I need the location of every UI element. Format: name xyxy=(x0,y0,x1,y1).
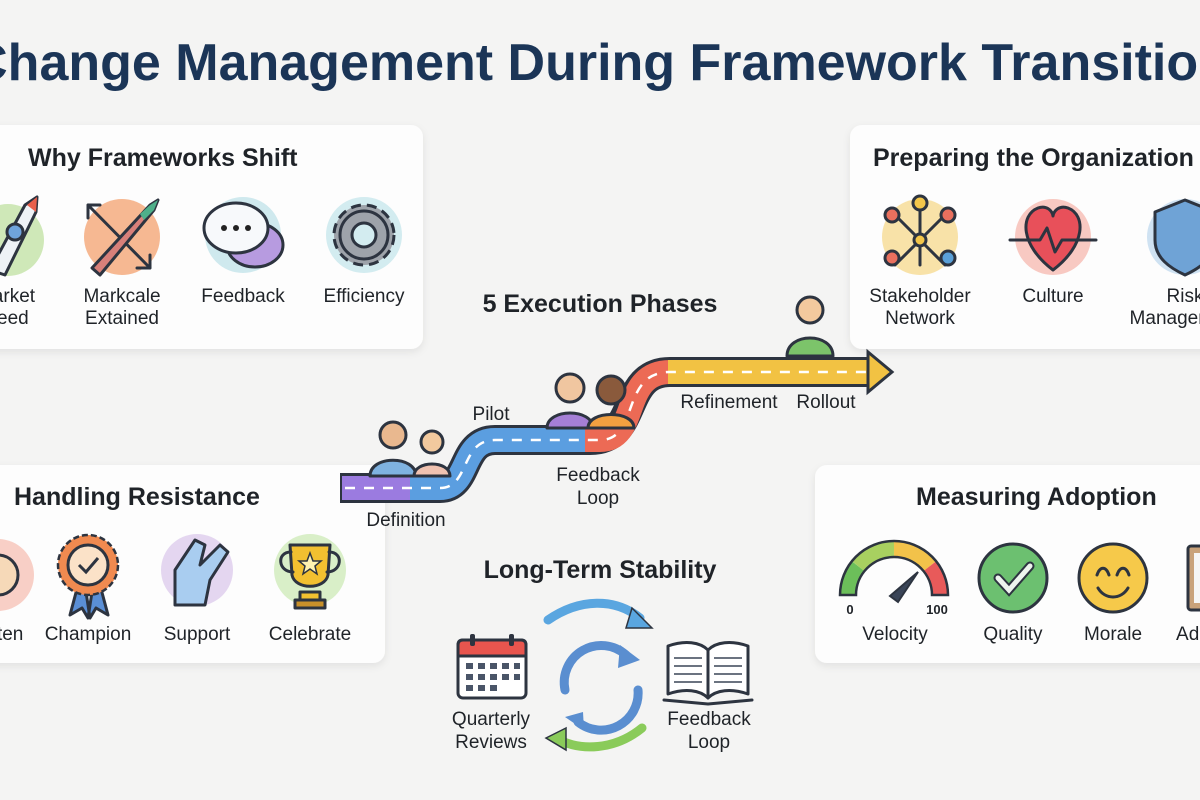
icon: stakeholder network xyxy=(882,196,958,275)
icon: rocket xyxy=(0,197,44,276)
heading: 5 execution phases: 5 Execution Phases xyxy=(483,290,717,318)
label: champion: Champion xyxy=(45,624,131,645)
label: gauge scale: 0 xyxy=(846,602,854,617)
icon: open book xyxy=(664,643,752,704)
icon: listen xyxy=(0,539,34,611)
text: Loop xyxy=(688,732,730,753)
icon: gear xyxy=(326,197,402,273)
panel: preparing the organization: Network xyxy=(885,308,955,329)
icon: gauge xyxy=(840,541,948,602)
chart: execution road xyxy=(340,297,892,488)
text: Reviews xyxy=(455,732,527,753)
label: quarterly reviews: Quarterly xyxy=(452,709,531,730)
icon: adherence board xyxy=(1188,546,1200,610)
people: pilot/feedback xyxy=(547,374,634,428)
icon: support hands xyxy=(161,534,233,606)
heading: measuring adoption: Measuring Adoption xyxy=(916,483,1157,511)
icon: smiley xyxy=(1079,544,1147,612)
icon: trophy xyxy=(274,534,346,608)
label: velocity: Velocity xyxy=(862,624,928,645)
label: stakeholder network: Stakeholder xyxy=(869,286,971,307)
heading: why frameworks shift: Why Frameworks Shift xyxy=(28,144,298,172)
panel: handling resistance xyxy=(0,465,385,663)
panel: preparing the organization xyxy=(850,125,1200,349)
people: definition xyxy=(370,422,450,476)
panel: why frameworks shift xyxy=(0,125,423,349)
label: rollout: Rollout xyxy=(796,392,856,413)
label: pilot: Pilot xyxy=(473,404,510,425)
label: culture: Culture xyxy=(1022,286,1084,307)
heading: handling resistance: Handling Resistance xyxy=(14,483,260,511)
icon: champion badge xyxy=(58,535,118,618)
icon: shield xyxy=(1147,199,1200,275)
label: feedback: Feedback xyxy=(201,286,285,307)
icon: market extended xyxy=(84,199,160,275)
heading: long-term stability: Long-Term Stability xyxy=(484,556,717,584)
heading: preparing: Preparing the Organization xyxy=(873,144,1194,172)
icon: quality check xyxy=(979,544,1047,612)
text: Loop xyxy=(577,488,619,509)
person: rollout xyxy=(787,297,833,356)
panel: measuring adoption xyxy=(815,465,1200,663)
label: celebrate: Celebrate xyxy=(269,624,351,645)
icon: heart xyxy=(1010,199,1096,275)
label: feedback loop: Feedback xyxy=(667,709,751,730)
label: refinement: Refinement xyxy=(680,392,778,413)
label: support: Support xyxy=(164,624,231,645)
icon: calendar xyxy=(458,634,526,698)
label: feedback loop: Feedback xyxy=(556,465,640,486)
label: definition: Definition xyxy=(366,510,446,531)
label: efficiency: Efficiency xyxy=(324,286,405,307)
panel: why frameworks shift: Extained xyxy=(85,308,159,329)
icon: cycle arrows xyxy=(546,603,652,750)
label: quality: Quality xyxy=(983,624,1043,645)
label: market extended: Markcale xyxy=(83,286,161,307)
label: morale: Morale xyxy=(1084,624,1142,645)
icon: feedback bubbles xyxy=(204,197,283,273)
panel: measuring adoption: 100 xyxy=(926,602,948,617)
